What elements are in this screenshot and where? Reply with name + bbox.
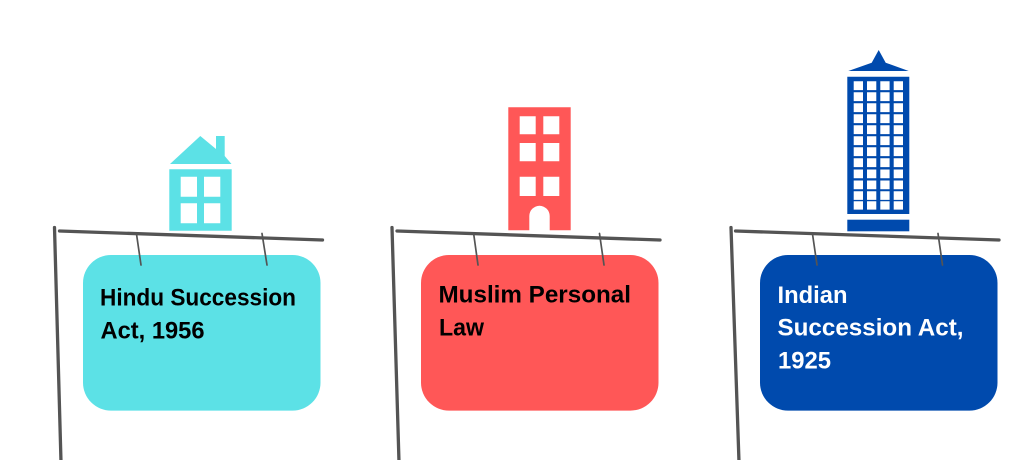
text: Indian Succession Act, 1925: Succession Act, [778,314,964,342]
icon: house [169,136,232,231]
text: Indian Succession Act, 1925: 1925 [778,348,831,374]
panel: Muslim Personal Law [392,107,660,460]
signboard: red card [421,255,658,411]
panel: Indian Succession Act [731,50,999,460]
text: Indian Succession Act, 1925 [778,282,964,374]
signboard: cyan card [83,255,320,411]
signpost frame [54,228,322,460]
signboard: blue card [760,255,998,411]
icon: mid-rise building [508,107,571,230]
text: Indian Succession Act, 1925: Indian [778,282,848,309]
panel: Hindu Succession Act [54,136,322,460]
signpost frame [392,228,660,460]
text: Muslim Personal Law [438,282,631,342]
text: Hindu Succession Act, 1956: Hindu Succession [100,285,296,312]
signpost frame [731,228,999,460]
text: Hindu Succession Act, 1956: Act, 1956 [100,317,204,344]
text: Muslim Personal Law: Law [439,315,484,342]
text: Muslim Personal Law: Muslim Personal [438,282,631,309]
icon: skyscraper [847,50,909,231]
text: Hindu Succession Act, 1956 [100,285,296,344]
